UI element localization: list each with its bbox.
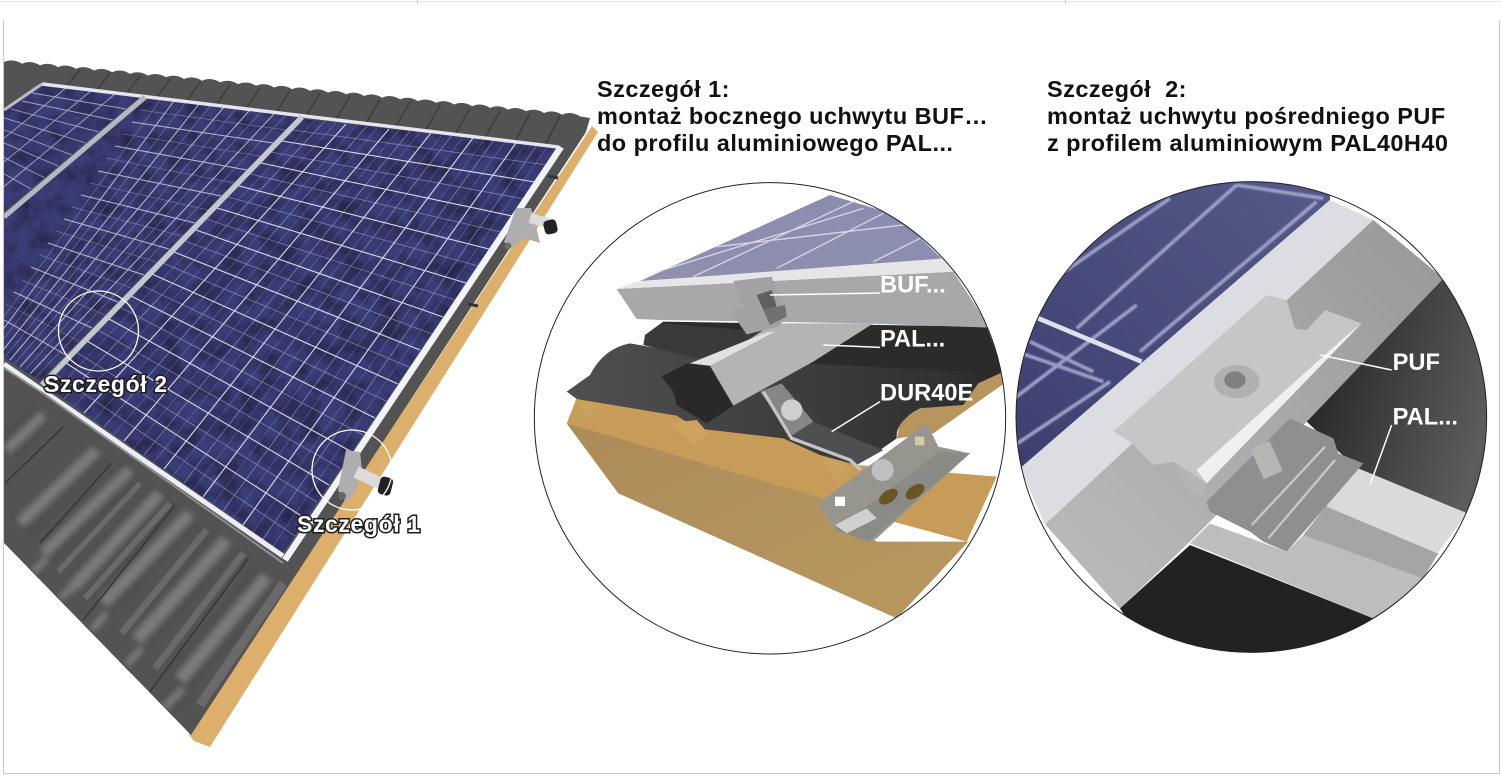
detail circle 1 marker bbox=[312, 430, 392, 510]
rail end cap bbox=[662, 363, 733, 423]
circle outline bbox=[1016, 182, 1487, 652]
panel 1: large right bbox=[40, 115, 562, 557]
rail top bbox=[1327, 465, 1467, 553]
battens under tile bbox=[575, 400, 576, 401]
wood batten top bbox=[567, 398, 997, 542]
panel frames bbox=[4, 84, 561, 563]
illustration: solar panels on tiled roof bbox=[0, 50, 600, 750]
tiles bbox=[567, 343, 978, 465]
label: DUR40E: DUR40E bbox=[880, 381, 973, 407]
mounting clamp detail 1 bbox=[338, 450, 394, 503]
heading: detail 2: z profilem aluminiowym PAL40H40 bbox=[1047, 130, 1448, 156]
panel 2: middle bbox=[0, 95, 302, 385]
heading: detail 1: Szczegół 1: bbox=[597, 76, 730, 102]
frame white strip bbox=[1020, 200, 1373, 524]
small hooks on strip bbox=[468, 176, 558, 306]
angle plate bbox=[818, 423, 970, 542]
detail 1 circle bbox=[534, 183, 1007, 654]
panel glass bbox=[640, 195, 943, 281]
panel 3: left bbox=[4, 86, 140, 212]
label: Szczegół 1: Szczegół 1 bbox=[297, 511, 421, 537]
BUF bracket bbox=[731, 277, 787, 334]
PUF clamp bbox=[1113, 295, 1362, 497]
wooden batten edge bbox=[189, 126, 598, 747]
label: PAL...: PAL... bbox=[880, 327, 945, 353]
base clamp bbox=[1207, 418, 1363, 552]
frame side bbox=[1045, 220, 1443, 608]
dark tile background bbox=[645, 322, 1003, 383]
mounting clamp upper bbox=[504, 208, 558, 250]
label: PUF: PUF bbox=[1393, 350, 1440, 376]
heading: detail 2: montaż uchwytu pośredniego PUF bbox=[1047, 103, 1446, 129]
circle outline bbox=[534, 183, 1006, 654]
heading: detail 1: montaż bocznego uchwytu BUF… bbox=[597, 103, 988, 129]
label: BUF...: BUF... bbox=[880, 272, 946, 298]
panel glass bbox=[1010, 175, 1330, 468]
wood right bbox=[897, 372, 1007, 438]
detail 2 circle bbox=[1010, 175, 1497, 655]
heading: detail 1: do profilu aluminiowego PAL... bbox=[597, 130, 953, 156]
lower frame bbox=[1190, 524, 1422, 618]
wood rafter side bbox=[567, 423, 968, 618]
label: Szczegół 2: Szczegół 2 bbox=[44, 371, 168, 397]
heading: detail 2: Szczegół 2: bbox=[1047, 76, 1187, 102]
rail bbox=[710, 323, 873, 406]
DUR hook bbox=[760, 383, 883, 470]
tile barrels bbox=[5, 415, 283, 713]
panel frame side bbox=[617, 272, 990, 328]
dark tile background bbox=[1306, 280, 1486, 513]
roof tiles bbox=[0, 50, 600, 750]
bolt bbox=[1260, 445, 1273, 475]
leader lines bbox=[770, 293, 880, 432]
dark lower bbox=[1120, 545, 1373, 655]
label: PAL...: PAL... bbox=[1393, 404, 1458, 430]
rail channel bbox=[1303, 505, 1438, 578]
detail circle 2 marker bbox=[58, 291, 138, 371]
leader lines bbox=[1320, 355, 1392, 485]
